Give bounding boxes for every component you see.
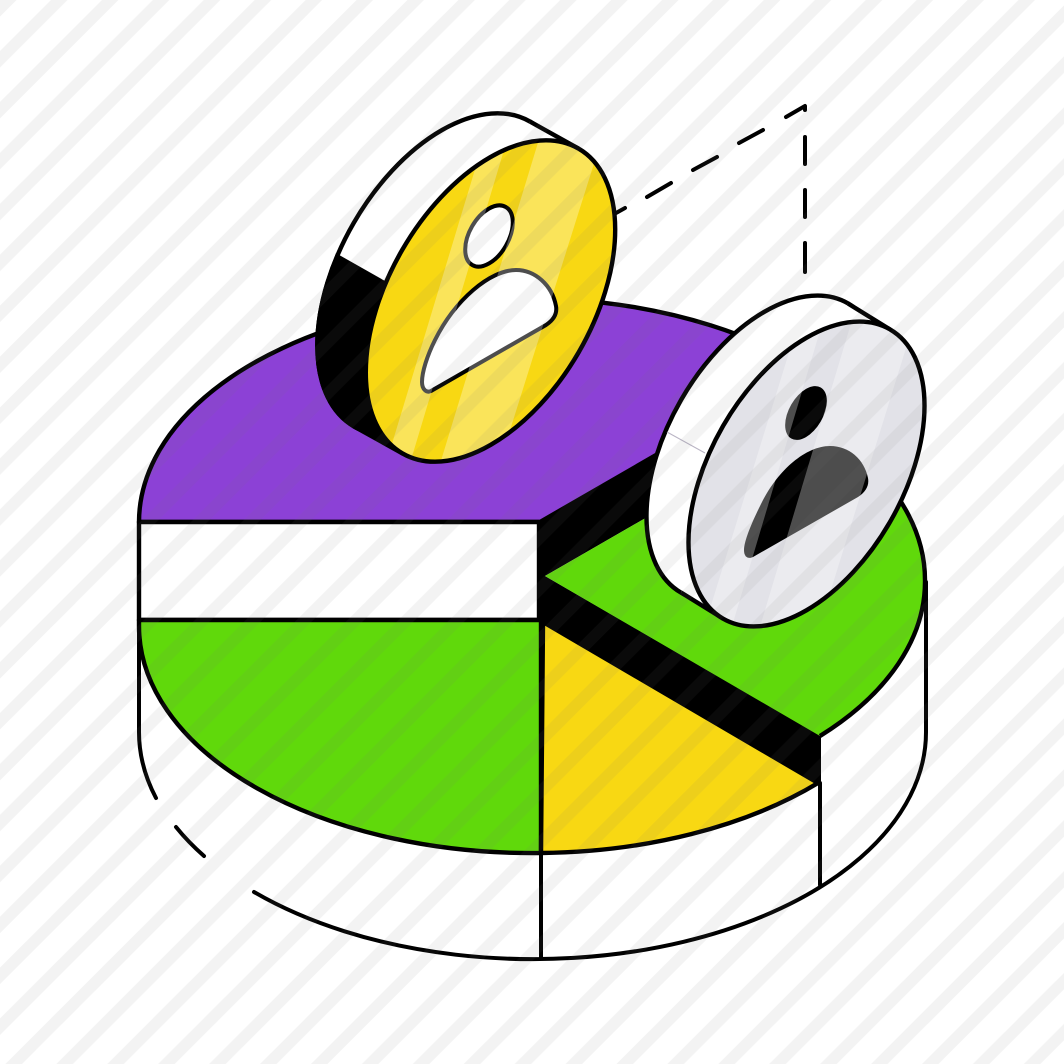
purple raised slice (139, 298, 800, 522)
green front slice (139, 620, 541, 853)
yellow slice (541, 622, 818, 853)
grey user token (644, 293, 927, 629)
pie chart (139, 298, 926, 959)
dashed guide line (616, 106, 805, 272)
glare bands (711, 324, 906, 622)
person icon (744, 379, 868, 558)
token face (314, 98, 667, 504)
glare bands (392, 142, 594, 460)
white slice side wall (139, 522, 539, 620)
cylinder base outline (139, 582, 926, 959)
token face outline (640, 281, 973, 667)
green raised slice (545, 452, 925, 736)
green slice edge (820, 455, 925, 736)
person icon outline (422, 197, 556, 392)
token side wall (598, 255, 931, 641)
token face outline (314, 98, 667, 504)
token face (640, 281, 973, 667)
black inner walls (539, 395, 821, 785)
token side wall (315, 111, 580, 456)
yellow user token (315, 111, 618, 464)
